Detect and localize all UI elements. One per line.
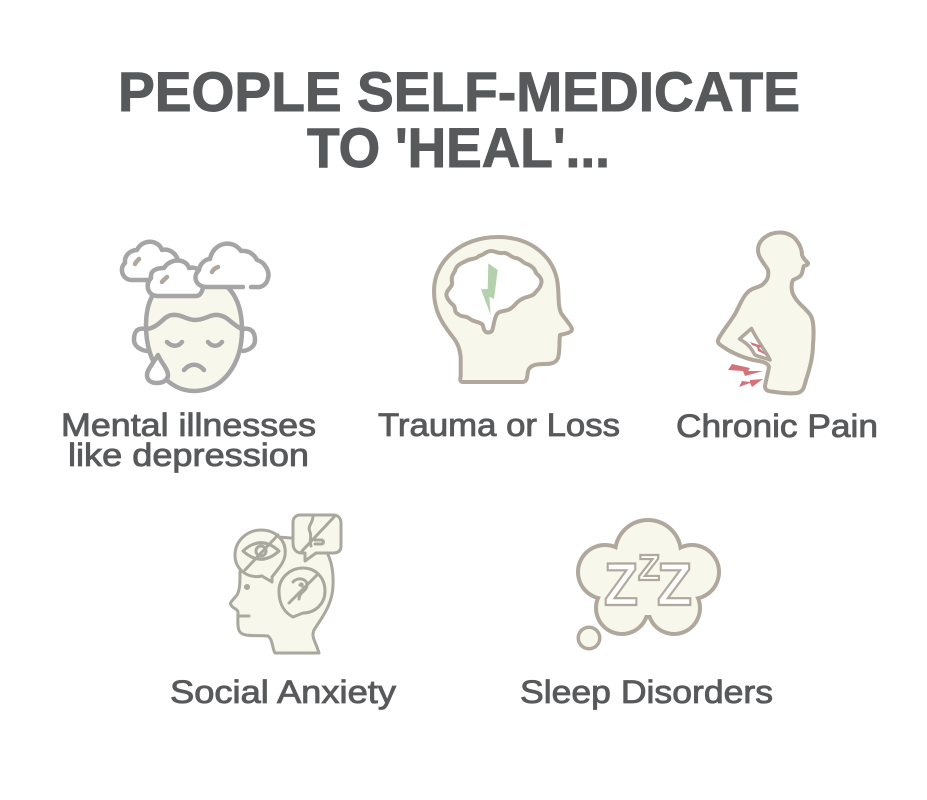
label: sleep disorders: Sleep Disorders [520, 674, 773, 710]
cloud right [196, 244, 268, 287]
rounded speech square [293, 515, 341, 561]
arm gap [740, 328, 770, 360]
label: mental illnesses: like depression [68, 437, 309, 473]
icon: thought cloud with ZZZ [576, 518, 721, 650]
title [118, 60, 800, 179]
label: social anxiety: Social Anxiety [170, 674, 396, 710]
icon: head with brain and lightning [434, 237, 572, 382]
cloud front middle [148, 260, 205, 296]
ZZZ letters [604, 547, 692, 618]
label: chronic pain: Chronic Pain [676, 408, 878, 444]
icon: depressed face under clouds [122, 242, 268, 391]
label: trauma or loss: Trauma or Loss [378, 407, 620, 443]
label: mental illnesses: Mental illnesses [61, 407, 316, 443]
title: TO 'HEAL'... [307, 116, 610, 179]
lightning bolt [481, 263, 498, 315]
ZZZ letters: Z [638, 547, 660, 588]
eye bubble [235, 530, 285, 582]
label: mental illnesses [61, 407, 316, 473]
icon: body with back pain [718, 232, 814, 393]
ZZZ letters: Z [657, 551, 692, 618]
tear drop [147, 355, 168, 383]
ZZZ letters: Z [604, 551, 638, 618]
blocked ear bubble [279, 568, 325, 617]
title: PEOPLE SELF-MEDICATE [118, 60, 800, 123]
pain bolts [728, 342, 768, 387]
cloud back left [122, 242, 178, 280]
icon: head with social anxiety bubbles [230, 515, 341, 653]
